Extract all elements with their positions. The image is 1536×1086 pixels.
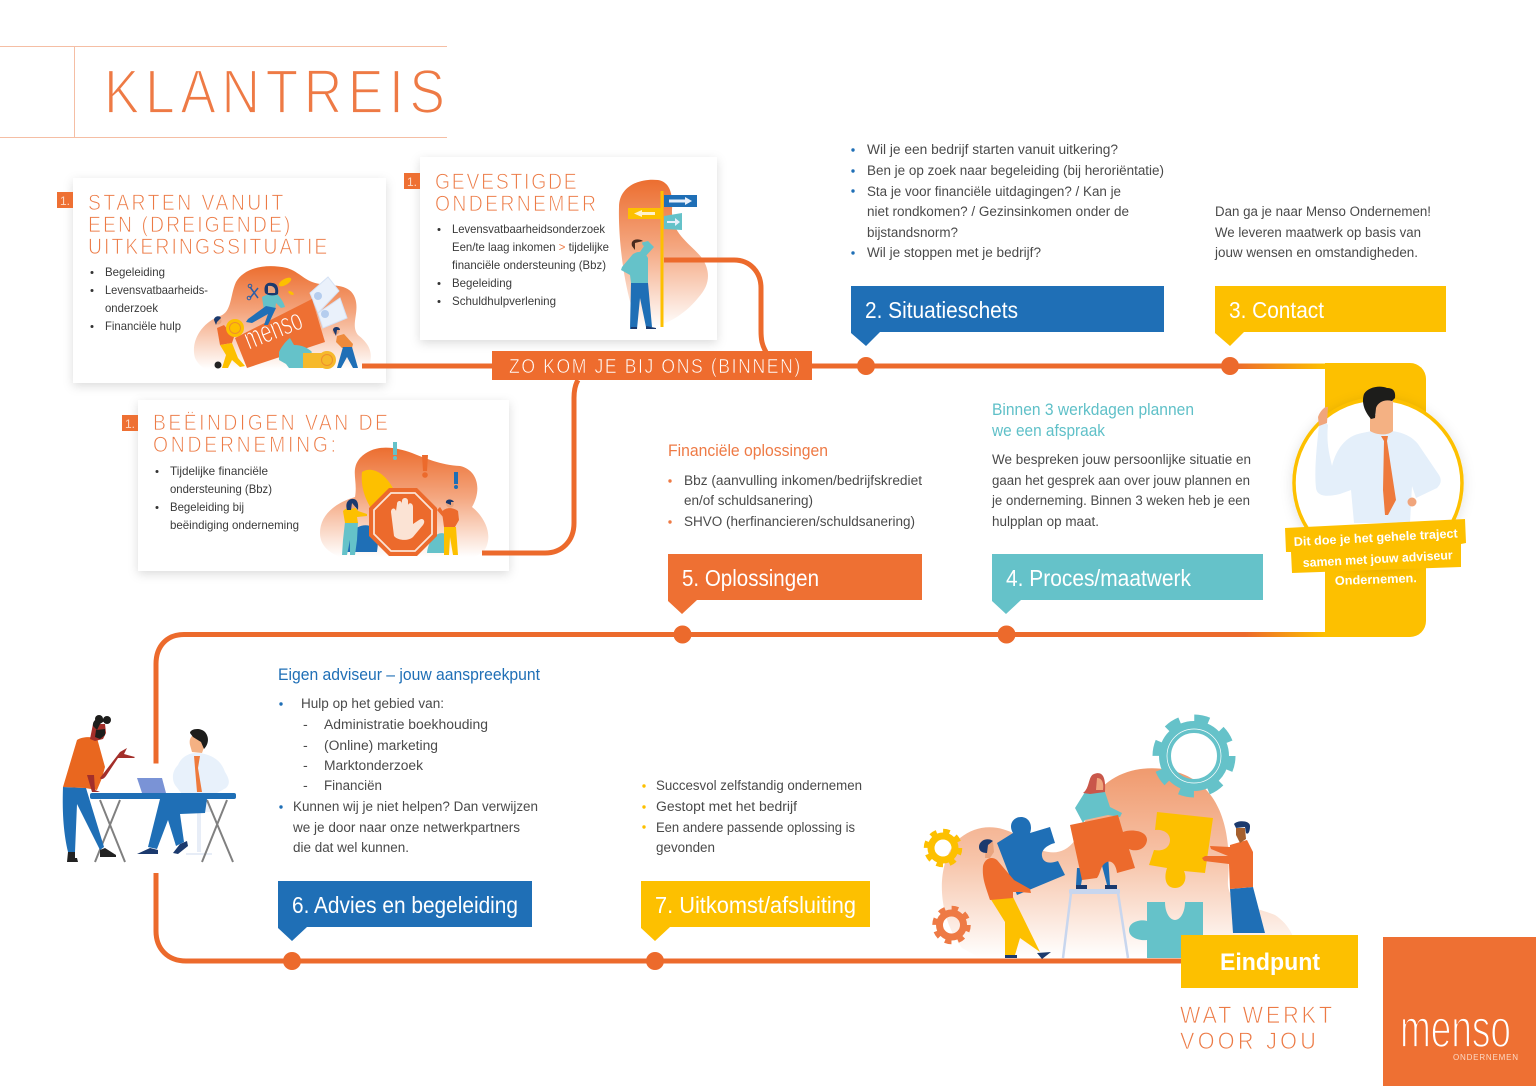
logo block: ONDERNEMEN (1453, 1053, 1518, 1062)
adviser note: samen met jouw adviseur (1302, 548, 1453, 570)
person: woman on stool (1063, 773, 1128, 958)
puzzle pieces (997, 812, 1213, 958)
badge: 1. (407, 175, 417, 189)
heading: STARTEN VANUIT (88, 191, 284, 215)
tagline (1180, 1001, 1332, 1054)
bullet list: Financiële hulp (105, 319, 181, 333)
panel: starten vanuit uitkering (57, 178, 386, 383)
heading (88, 191, 327, 259)
step 6 text: Administratie boekhouding (324, 717, 488, 733)
step 7 text: Succesvol zelfstandig ondernemen (656, 778, 862, 794)
step 6 label: 6. Advies en begeleiding (292, 892, 518, 918)
step 6 text: Eigen adviseur – jouw aanspreekpunt (278, 666, 540, 684)
bullet list: Begeleiding (105, 265, 165, 279)
title block (0, 46, 447, 138)
bullet list: Begeleiding bij (170, 500, 244, 514)
step 7 text: Een andere passende oplossing is (656, 820, 855, 836)
step 6 text (278, 666, 540, 856)
adviser lane (1235, 363, 1426, 637)
person: man left (979, 839, 1051, 959)
step 6 label (278, 881, 532, 941)
illustration: money and people: menso (239, 302, 307, 356)
step 6 text: - (303, 717, 308, 733)
step 4 text: We bespreken jouw persoonlijke situatie en (992, 452, 1251, 468)
step 2 text: Wil je stoppen met je bedrijf? (867, 245, 1041, 261)
step 3 label (1215, 286, 1446, 346)
band: zo kom je bij ons: ZO KOM JE BIJ ONS (BINNEN) (509, 355, 800, 377)
bullet list: Begeleiding (452, 276, 512, 290)
heading: GEVESTIGDE (435, 170, 577, 194)
illustration: man at signpost (619, 180, 708, 329)
journey line (156, 260, 1250, 961)
person: man right (1202, 821, 1265, 933)
timeline dots (283, 357, 1239, 970)
step 5 text: Bbz (aanvulling inkomen/bedrijfskrediet (684, 473, 922, 489)
step 4 text: we een afspraak (991, 422, 1106, 440)
badge (57, 192, 73, 208)
step 7 text: gevonden (656, 840, 715, 856)
step 4 label: 4. Proces/maatwerk (1006, 565, 1191, 591)
bullet list: Levensvatbaarheidsonderzoek (452, 222, 606, 236)
step 6 text: Hulp op het gebied van: (301, 696, 444, 712)
logo block (1383, 937, 1536, 1086)
step 4 text: hulpplan op maat. (992, 514, 1099, 530)
step 5 text (668, 442, 922, 530)
step 6 text: we je door naar onze netwerkpartners (292, 820, 520, 836)
step 6 text: - (303, 778, 308, 794)
bullet list: Schuldhulpverlening (452, 294, 556, 308)
step 4 text (991, 401, 1251, 530)
step 2 text: bijstandsnorm? (867, 225, 958, 241)
step 3 text (1214, 204, 1431, 261)
step 2 text: Wil je een bedrijf starten vanuit uitkering? (867, 142, 1118, 158)
bullet list: Een/te laag inkomen > tijdelijke (452, 240, 609, 254)
adviser note: Dit doe je het gehele traject (1293, 526, 1459, 549)
badge (404, 173, 420, 189)
gear: yellow (926, 831, 960, 865)
step 5 text: Financiële oplossingen (668, 442, 828, 460)
step 4 label (992, 554, 1263, 614)
step 7 label (641, 881, 870, 941)
gear: orange (934, 908, 968, 942)
illustration: stop sign (320, 442, 488, 557)
heading: ONDERNEMER (435, 192, 596, 216)
step 4 text: je onderneming. Binnen 3 weken heb je een (991, 493, 1250, 509)
step 5 text: en/of schuldsanering) (684, 493, 813, 509)
step 2 label (851, 286, 1164, 346)
tagline: VOOR JOU (1180, 1027, 1316, 1054)
step 2 text: niet rondkomen? / Gezinsinkomen onder de (867, 204, 1129, 220)
bullet list (90, 265, 208, 333)
adviser note (1285, 519, 1466, 588)
step 3 label: 3. Contact (1229, 297, 1325, 323)
step 6 text: Kunnen wij je niet helpen? Dan verwijzen (293, 799, 538, 815)
bullet list: beëindiging onderneming (170, 518, 299, 532)
panel: beeindigen onderneming (122, 400, 509, 571)
end point label (1181, 935, 1358, 988)
step 6 text: (Online) marketing (324, 738, 438, 754)
illustration: advice meeting at table (63, 715, 236, 862)
step 2 label: 2. Situatieschets (865, 297, 1018, 323)
bullet list: financiële ondersteuning (Bbz) (452, 258, 606, 272)
step 3 text: Dan ga je naar Menso Ondernemen! (1215, 204, 1431, 220)
step 6 text: - (303, 758, 308, 774)
heading: UITKERINGSSITUATIE (88, 235, 327, 259)
bullet list (438, 222, 609, 308)
step 2 text: Sta je voor financiële uitdagingen? / Kan je (867, 184, 1121, 200)
step 7 text (642, 778, 862, 856)
heading (153, 411, 388, 457)
step 4 text: gaan het gesprek aan over jouw plannen en (992, 473, 1250, 489)
bullet list: onderzoek (105, 301, 159, 315)
adviser circle with man (1294, 387, 1462, 567)
bullet list: Tijdelijke financiële (170, 464, 268, 478)
step 2 text (851, 142, 1164, 261)
gear: teal (1156, 718, 1232, 794)
step 6 text: - (303, 738, 308, 754)
bullet list (156, 464, 299, 532)
heading: ONDERNEMING: (153, 433, 336, 457)
adviser note: Ondernemen. (1335, 571, 1417, 588)
tagline: WAT WERKT (1180, 1001, 1332, 1028)
step 3 text: We leveren maatwerk op basis van (1215, 225, 1421, 241)
end point label: Eindpunt (1220, 949, 1320, 976)
title block: KLANTREIS (104, 58, 445, 127)
badge (122, 415, 138, 431)
step 7 label: 7. Uitkomst/afsluiting (655, 892, 856, 918)
badge: 1. (60, 194, 70, 208)
step 6 text: Marktonderzoek (324, 758, 424, 774)
band: zo kom je bij ons (492, 351, 812, 380)
step 6 text: die dat wel kunnen. (293, 840, 409, 856)
heading: EEN (DREIGENDE) (88, 213, 290, 237)
step 2 text: Ben je op zoek naar begeleiding (bij heroriëntatie) (867, 163, 1164, 179)
step 7 text: Gestopt met het bedrijf (656, 799, 797, 815)
bullet list: ondersteuning (Bbz) (170, 482, 272, 496)
step 6 text: Financiën (324, 778, 382, 794)
step 5 text: SHVO (herfinancieren/schuldsanering) (684, 514, 915, 530)
bullet list: Levensvatbaarheids- (105, 283, 208, 297)
heading: BEËINDIGEN VAN DE (153, 411, 388, 435)
illustration: puzzle team (926, 718, 1297, 959)
illustration: money and people (194, 266, 371, 369)
heading (435, 170, 596, 216)
panel: gevestigde ondernemer (404, 157, 717, 340)
step 4 text: Binnen 3 werkdagen plannen (992, 401, 1194, 419)
step 5 label (668, 554, 922, 614)
step 3 text: jouw wensen en omstandigheden. (1214, 245, 1418, 261)
step 5 label: 5. Oplossingen (682, 565, 819, 591)
badge: 1. (125, 417, 135, 431)
